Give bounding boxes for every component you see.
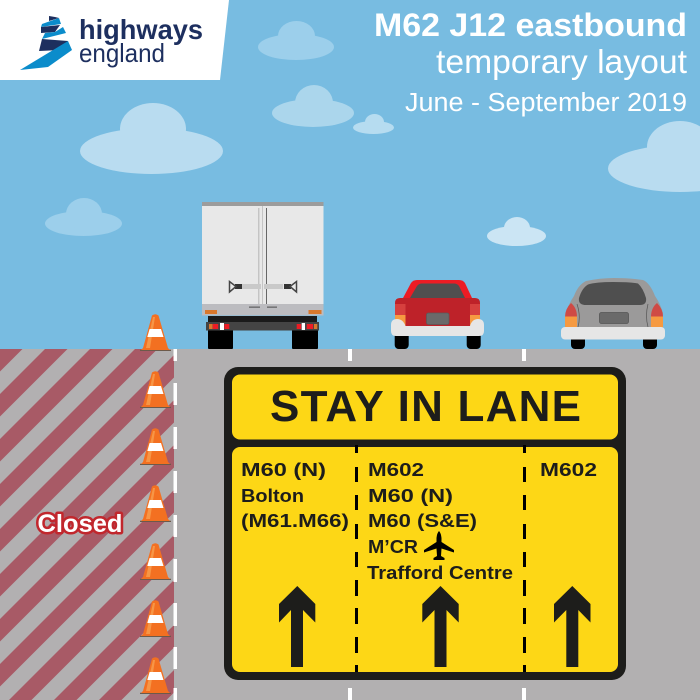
- red car roof: [403, 280, 472, 298]
- truck lower band: [202, 304, 324, 316]
- grey car tail lights: [565, 303, 663, 328]
- truck orange markers: [205, 310, 322, 314]
- cloud: middle: [272, 85, 354, 127]
- cone 5: [140, 543, 171, 580]
- red car body: [395, 298, 480, 327]
- sign heading: STAY IN LANE: [270, 382, 581, 431]
- cone 3: [140, 428, 171, 465]
- grey car rear window: [579, 282, 646, 305]
- traffic cones: [140, 314, 171, 694]
- logo wordmark england: england: [79, 38, 165, 68]
- cloud: small: [353, 114, 394, 134]
- dates: June - September 2019: June - September 2019: [405, 89, 687, 117]
- lane 1 destinations: [241, 460, 349, 531]
- sky background: [0, 0, 700, 350]
- title block: [374, 7, 687, 117]
- lane 1 destinations: (M61.M66): [241, 511, 349, 531]
- cloud: top centre: [258, 21, 334, 60]
- red car bumper: [391, 319, 484, 336]
- truck latches: [249, 306, 277, 308]
- lane dividers: [355, 445, 526, 672]
- truck tail lights: [209, 323, 317, 330]
- title: M62 J12 eastbound: M62 J12 eastbound: [374, 7, 687, 43]
- grey car wheels: [571, 335, 657, 349]
- lane 2 destinations: [367, 460, 513, 583]
- closed label: Closed: [38, 510, 122, 538]
- arrow lane 2: [422, 586, 459, 667]
- truck body: [202, 206, 324, 304]
- cone 6: [140, 600, 171, 637]
- truck wheels: [208, 328, 318, 349]
- logo wordmark highways: highways: [79, 14, 203, 45]
- cloud: right edge: [608, 121, 700, 192]
- red car rear window: [410, 284, 465, 298]
- lane 1 destinations: Bolton: [241, 486, 304, 506]
- grey car bumper: [561, 327, 665, 340]
- road surface: [0, 349, 700, 700]
- sign lower panel: [232, 447, 618, 672]
- cloud: lower left: [45, 198, 122, 236]
- cone 4: [140, 485, 171, 522]
- truck rear bar: [206, 322, 319, 330]
- lane 2 destinations: M60 (N): [368, 486, 453, 506]
- red car number plate: [426, 313, 449, 324]
- grey car number plate: [600, 312, 628, 324]
- sign header panel: [232, 374, 618, 440]
- lane 2 destinations: M602: [368, 460, 424, 480]
- red car tail lights: [395, 304, 480, 327]
- icon: highways england logo mark: [20, 16, 72, 70]
- grey car body: [565, 278, 663, 328]
- logo panel: [0, 0, 229, 80]
- truck door lines and handles: [230, 206, 296, 314]
- road sign: [224, 367, 626, 680]
- subtitle: temporary layout: temporary layout: [436, 43, 687, 80]
- arrow lane 3: [554, 586, 590, 667]
- truck underside: [208, 316, 317, 322]
- lane 2 destinations: M60 (S&E): [368, 511, 477, 531]
- grey car panel lines: [577, 304, 648, 327]
- lane 3 destination: M602: [540, 460, 597, 480]
- truck roof band: [202, 202, 324, 206]
- cone 7: [140, 657, 171, 694]
- lane 2 destinations: Trafford Centre: [367, 563, 513, 583]
- red car wheels: [395, 332, 481, 349]
- arrow lane 1: [279, 586, 315, 667]
- cone 1: [140, 314, 171, 351]
- sign backing: [224, 367, 626, 680]
- cloud: small right: [487, 217, 546, 246]
- closed lane hatching: [0, 349, 174, 700]
- lane 1 destinations: M60 (N): [241, 460, 326, 480]
- cloud: large left: [80, 103, 223, 174]
- lane markings: [174, 349, 526, 700]
- grey car: [561, 278, 665, 349]
- cone 2: [140, 371, 171, 408]
- lane 2 destinations: M’CR: [368, 537, 418, 557]
- truck rear: [202, 202, 324, 349]
- red car: [391, 280, 484, 349]
- icon: airport plane: [424, 531, 454, 560]
